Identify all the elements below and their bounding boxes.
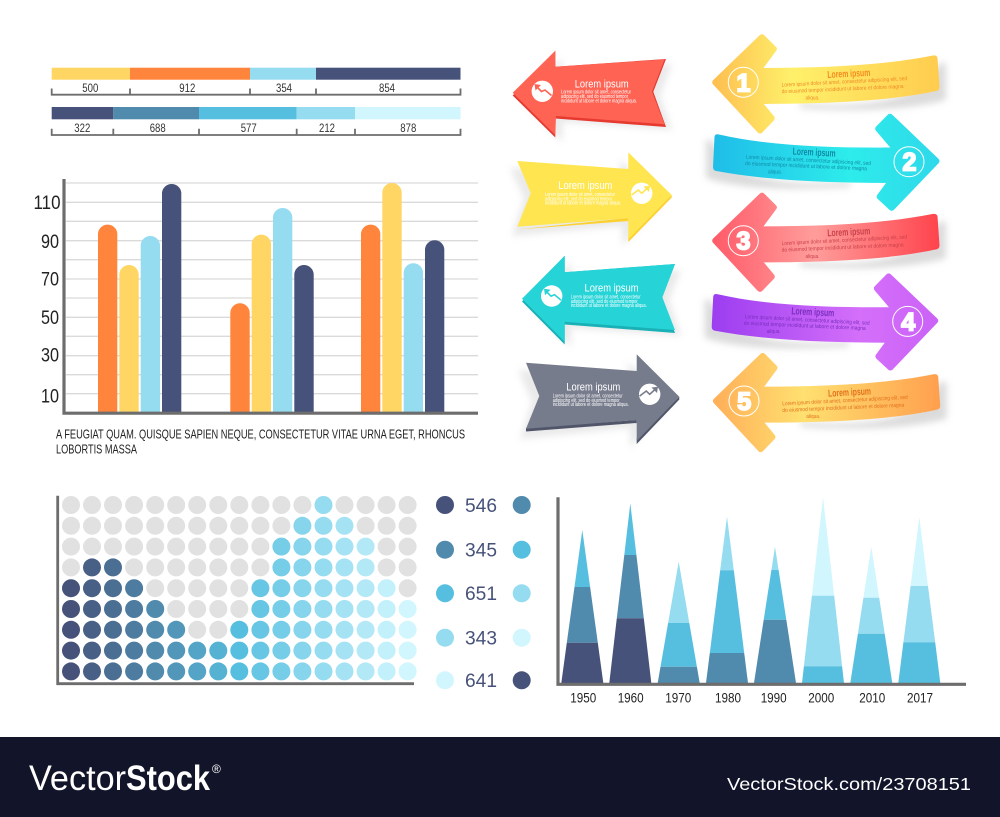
ribbon arrow 2: 2: [903, 149, 916, 177]
triangle chart: 1950: [570, 690, 596, 706]
ribbon arrow 5: Lorem ipsum: [828, 386, 871, 400]
segmented bar 1: 354: [276, 81, 292, 95]
ribbon arrow 4: [705, 276, 935, 368]
segmented bar 1: [52, 68, 460, 95]
segmented bar 2: 577: [241, 121, 257, 135]
segmented bar 2: 322: [74, 121, 91, 135]
segmented bar 1: 500: [82, 81, 99, 95]
bar chart: 110: [34, 193, 60, 214]
ribbon arrow 3: do eiusmod tempor incididunt ut labore et dolore magna: [782, 242, 905, 254]
dot legend: [436, 496, 531, 692]
bar chart: 70: [41, 270, 59, 291]
arrow: teal: [522, 256, 681, 347]
ribbon arrow 2: Lorem ipsum: [792, 147, 836, 160]
triangle chart: 1980: [715, 690, 741, 706]
ribbon arrow 2: do eiusmod tempor incididunt ut labore et dolore magna: [745, 161, 868, 172]
ribbon arrow 4: Lorem ipsum dolor sit amet, consectetur adipiscing elit, sed: [745, 314, 870, 327]
arrow: yellow: Lorem ipsum: [558, 180, 612, 192]
dot legend: 641: [465, 671, 497, 692]
segmented bar 2: 688: [150, 121, 166, 135]
ribbon arrow 2: [706, 117, 936, 208]
dot legend: 343: [465, 628, 497, 650]
arrow: teal: Lorem ipsum dolor sit amet, consectetur: [571, 294, 641, 300]
ribbon arrow 2: aliqua.: [768, 170, 782, 176]
triangle chart: 1990: [761, 690, 787, 706]
ribbon arrow 1: [715, 37, 946, 131]
ribbon arrow 4: 4: [901, 308, 915, 336]
dot legend: 546: [465, 496, 497, 517]
footer band: Vector: [29, 759, 126, 798]
triangle chart: 2010: [859, 690, 885, 706]
ribbon arrow 1: Lorem ipsum: [827, 68, 871, 81]
arrow: teal: Lorem ipsum: [584, 282, 638, 294]
segmented bar 2: 878: [400, 121, 417, 135]
footer band: VectorStock.com/23708151: [727, 774, 971, 794]
arrow: red: [513, 51, 672, 142]
chart caption: [56, 426, 465, 456]
footer band: [0, 737, 1000, 817]
bar chart: 30: [41, 346, 59, 367]
ribbon arrow 5: [716, 356, 947, 449]
arrow: red: Lorem ipsum dolor sit amet, consectetur: [561, 90, 631, 96]
ribbon arrow 1: do eiusmod tempor incididunt ut labore et dolore magna: [782, 84, 905, 95]
dot legend: 651: [465, 584, 497, 605]
ribbon arrow 1: Lorem ipsum dolor sit amet, consectetur adipiscing elit, sed: [781, 76, 907, 89]
ribbon arrow 3: Lorem ipsum: [827, 226, 871, 239]
chart caption: A FEUGIAT QUAM. QUISQUE SAPIEN NEQUE, CONSECTETUR VITAE URNA EGET, RHONCUS: [56, 426, 465, 442]
arrow: red: Lorem ipsum: [575, 78, 629, 90]
arrow: yellow: Lorem ipsum dolor sit amet, consectetur: [545, 192, 615, 198]
triangle chart: [558, 497, 966, 706]
dot matrix chart: [58, 496, 414, 684]
arrow: red: adipiscing elit, sed do eiusmod tempor: [561, 94, 628, 100]
triangle chart: 2017: [907, 690, 933, 706]
triangle chart: 1960: [618, 690, 644, 706]
ribbon arrow 3: Lorem ipsum dolor sit amet, consectetur adipiscing elit, sed: [781, 235, 907, 247]
arrow: grey: adipiscing elit, sed do eiusmod tempor: [553, 398, 620, 404]
arrow: grey: [518, 354, 679, 448]
ribbon arrow 4: aliqua.: [767, 329, 781, 335]
arrow: grey: incididunt ut labore et dolore magna aliqua.: [553, 402, 629, 408]
triangle chart: 1970: [665, 690, 691, 706]
ribbon arrow 5: do eiusmod tempor incididunt ut labore et dolore magna: [782, 403, 905, 414]
segmented bar 1: 912: [179, 81, 196, 95]
ribbon arrow 5: Lorem ipsum dolor sit amet, consectetur adipiscing elit, sed: [782, 395, 908, 407]
ribbon arrow 1: aliqua.: [806, 96, 820, 102]
ribbon arrow 3: aliqua.: [806, 254, 820, 260]
dot legend: 345: [465, 540, 497, 562]
arrow: teal: incididunt ut labore et dolore magna aliqua.: [571, 303, 647, 309]
arrow: grey: Lorem ipsum dolor sit amet, consectetur: [553, 394, 623, 400]
bar chart: [34, 179, 478, 413]
bar chart: 10: [41, 386, 59, 407]
footer band: Stock: [126, 759, 210, 798]
footer band: ®: [212, 762, 221, 776]
arrow: yellow: [510, 152, 672, 246]
ribbon arrow 5: 5: [737, 388, 751, 416]
arrow: yellow: adipiscing elit, sed do eiusmod tempor: [545, 196, 612, 202]
ribbon arrow 5: aliqua.: [806, 414, 821, 420]
arrow: yellow: incididunt ut labore et dolore magna aliqua.: [545, 201, 621, 207]
ribbon arrow 2: Lorem ipsum dolor sit amet, consectetur adipiscing elit, sed: [746, 155, 871, 167]
segmented bar 1: 854: [379, 81, 395, 95]
triangle chart: 2000: [808, 690, 834, 706]
ribbon arrow 3: 3: [737, 228, 750, 256]
bar chart: 50: [41, 308, 59, 329]
arrow: red: incididunt ut labore et dolore magna aliqua.: [561, 98, 637, 104]
ribbon arrow 1: 1: [737, 69, 751, 97]
arrow: teal: adipiscing elit, sed do eiusmod tempor: [571, 299, 638, 305]
arrow: grey: Lorem ipsum: [566, 382, 620, 394]
segmented bar 2: 212: [319, 121, 335, 135]
segmented bar 2: [52, 107, 460, 135]
chart caption: LOBORTIS MASSA: [56, 442, 137, 456]
ribbon arrow 3: [715, 196, 946, 289]
ribbon arrow 4: Lorem ipsum: [791, 306, 835, 319]
ribbon arrow 4: do eiusmod tempor incididunt ut labore et dolore magna: [744, 321, 867, 332]
bar chart: 90: [41, 232, 59, 253]
